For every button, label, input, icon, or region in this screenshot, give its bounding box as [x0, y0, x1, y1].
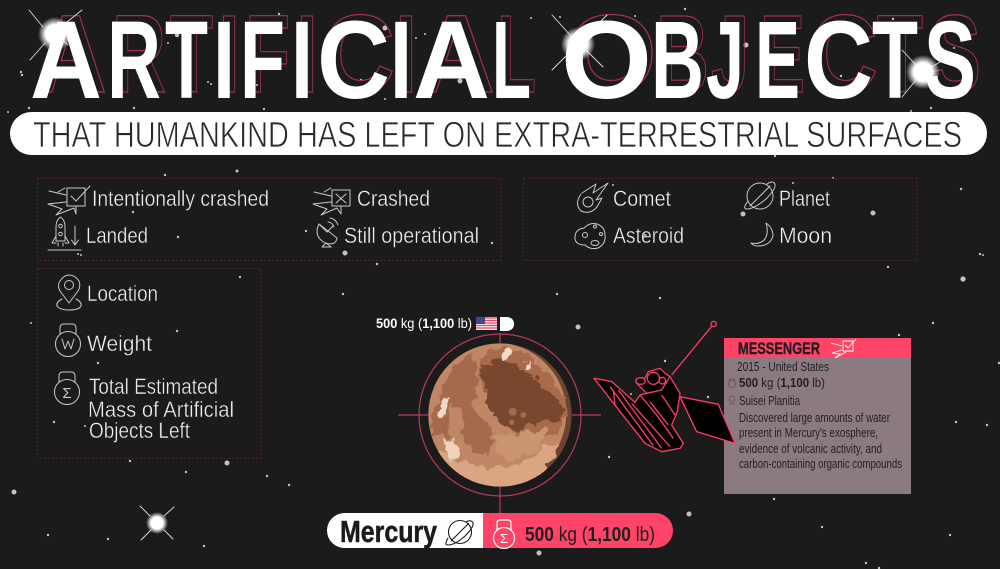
title outline — [35, 0, 981, 116]
callout details: present in Mercury's exosphere, — [739, 425, 878, 440]
label: crashed: Crashed — [357, 186, 430, 211]
title: I — [291, 0, 313, 122]
label: location: Location — [87, 281, 158, 306]
callout details: evidence of volcanic activity, and — [739, 441, 882, 456]
label: object mass and origin: 500 kg (1,100 lb) — [376, 315, 472, 331]
small callout icons — [728, 379, 736, 405]
label: planet: Planet — [779, 186, 831, 211]
icon: total mass: Σ — [500, 531, 508, 546]
icon: intentionally crashed small — [831, 339, 856, 358]
callout details: 500 kg (1,100 lb) — [739, 375, 825, 390]
label: asteroid: Asteroid — [613, 223, 684, 248]
title: T — [872, 0, 918, 122]
icon: comet — [578, 183, 608, 212]
title: O — [561, 0, 652, 122]
panel: mission status legend — [38, 178, 500, 260]
icon: location pin — [57, 275, 81, 310]
callout heading: MESSENGER — [738, 339, 820, 358]
icon: total mass — [494, 520, 514, 548]
icon: total mass: Σ — [62, 385, 72, 402]
icon: total mass — [54, 372, 80, 404]
icon: crashed — [313, 188, 350, 215]
spacecraft body and left solar panel — [594, 368, 683, 452]
title: I — [390, 0, 412, 122]
label: still operational: Still operational — [344, 223, 479, 248]
title: B — [651, 0, 704, 122]
right solar panel — [680, 397, 735, 443]
callout details: carbon-containing organic compounds — [739, 456, 902, 471]
callout details: Suisei Planitia — [739, 393, 801, 408]
icon: planet — [745, 182, 775, 209]
label: comet: Comet — [613, 186, 672, 211]
icon: US flag — [476, 317, 497, 330]
panel: symbols legend — [38, 268, 260, 458]
callout details: Discovered large amounts of water — [739, 410, 891, 425]
title: C — [317, 0, 390, 122]
title: I — [213, 0, 235, 122]
label: intentionally crashed: Intentionally crashed — [92, 186, 269, 211]
planet name pill — [327, 513, 673, 549]
callout details: 2015 - United States — [737, 359, 829, 374]
icon: moon — [751, 223, 773, 246]
title: A — [413, 0, 490, 122]
icon: asteroid — [575, 224, 605, 249]
icon: planet — [446, 520, 473, 545]
icon: weight — [56, 324, 80, 356]
label: total estimated mass — [88, 374, 234, 443]
label: total estimated mass: Mass of Artificial — [88, 397, 234, 422]
icon: still operational — [317, 218, 338, 247]
panel: object type legend — [524, 178, 916, 260]
icon: landed on moon marker — [500, 317, 514, 331]
icon: landed — [48, 217, 81, 250]
title: S — [924, 0, 976, 122]
title: J — [706, 0, 744, 122]
title: L — [492, 0, 531, 122]
label: landed: Landed — [86, 223, 148, 248]
callout: MESSENGER — [724, 338, 911, 494]
title — [30, 0, 976, 122]
title: T — [165, 0, 208, 122]
antenna — [672, 321, 716, 375]
title: A — [30, 0, 102, 122]
title: F — [240, 0, 285, 122]
total mass value: 500 kg (1,100 lb) — [525, 524, 655, 546]
planet name: Mercury — [340, 514, 438, 549]
label: total estimated mass: Objects Left — [89, 418, 191, 443]
title: E — [755, 0, 800, 122]
title: C — [804, 0, 873, 122]
title: R — [107, 0, 161, 122]
icon: intentionally crashed — [48, 186, 90, 215]
callout details — [737, 359, 902, 471]
crosshair around planet — [398, 333, 601, 514]
label: moon: Moon — [779, 223, 832, 248]
label: total estimated mass: Total Estimated — [89, 374, 218, 399]
label: weight: Weight — [87, 331, 153, 356]
satellite — [594, 321, 735, 452]
planet: Mercury — [425, 342, 573, 492]
